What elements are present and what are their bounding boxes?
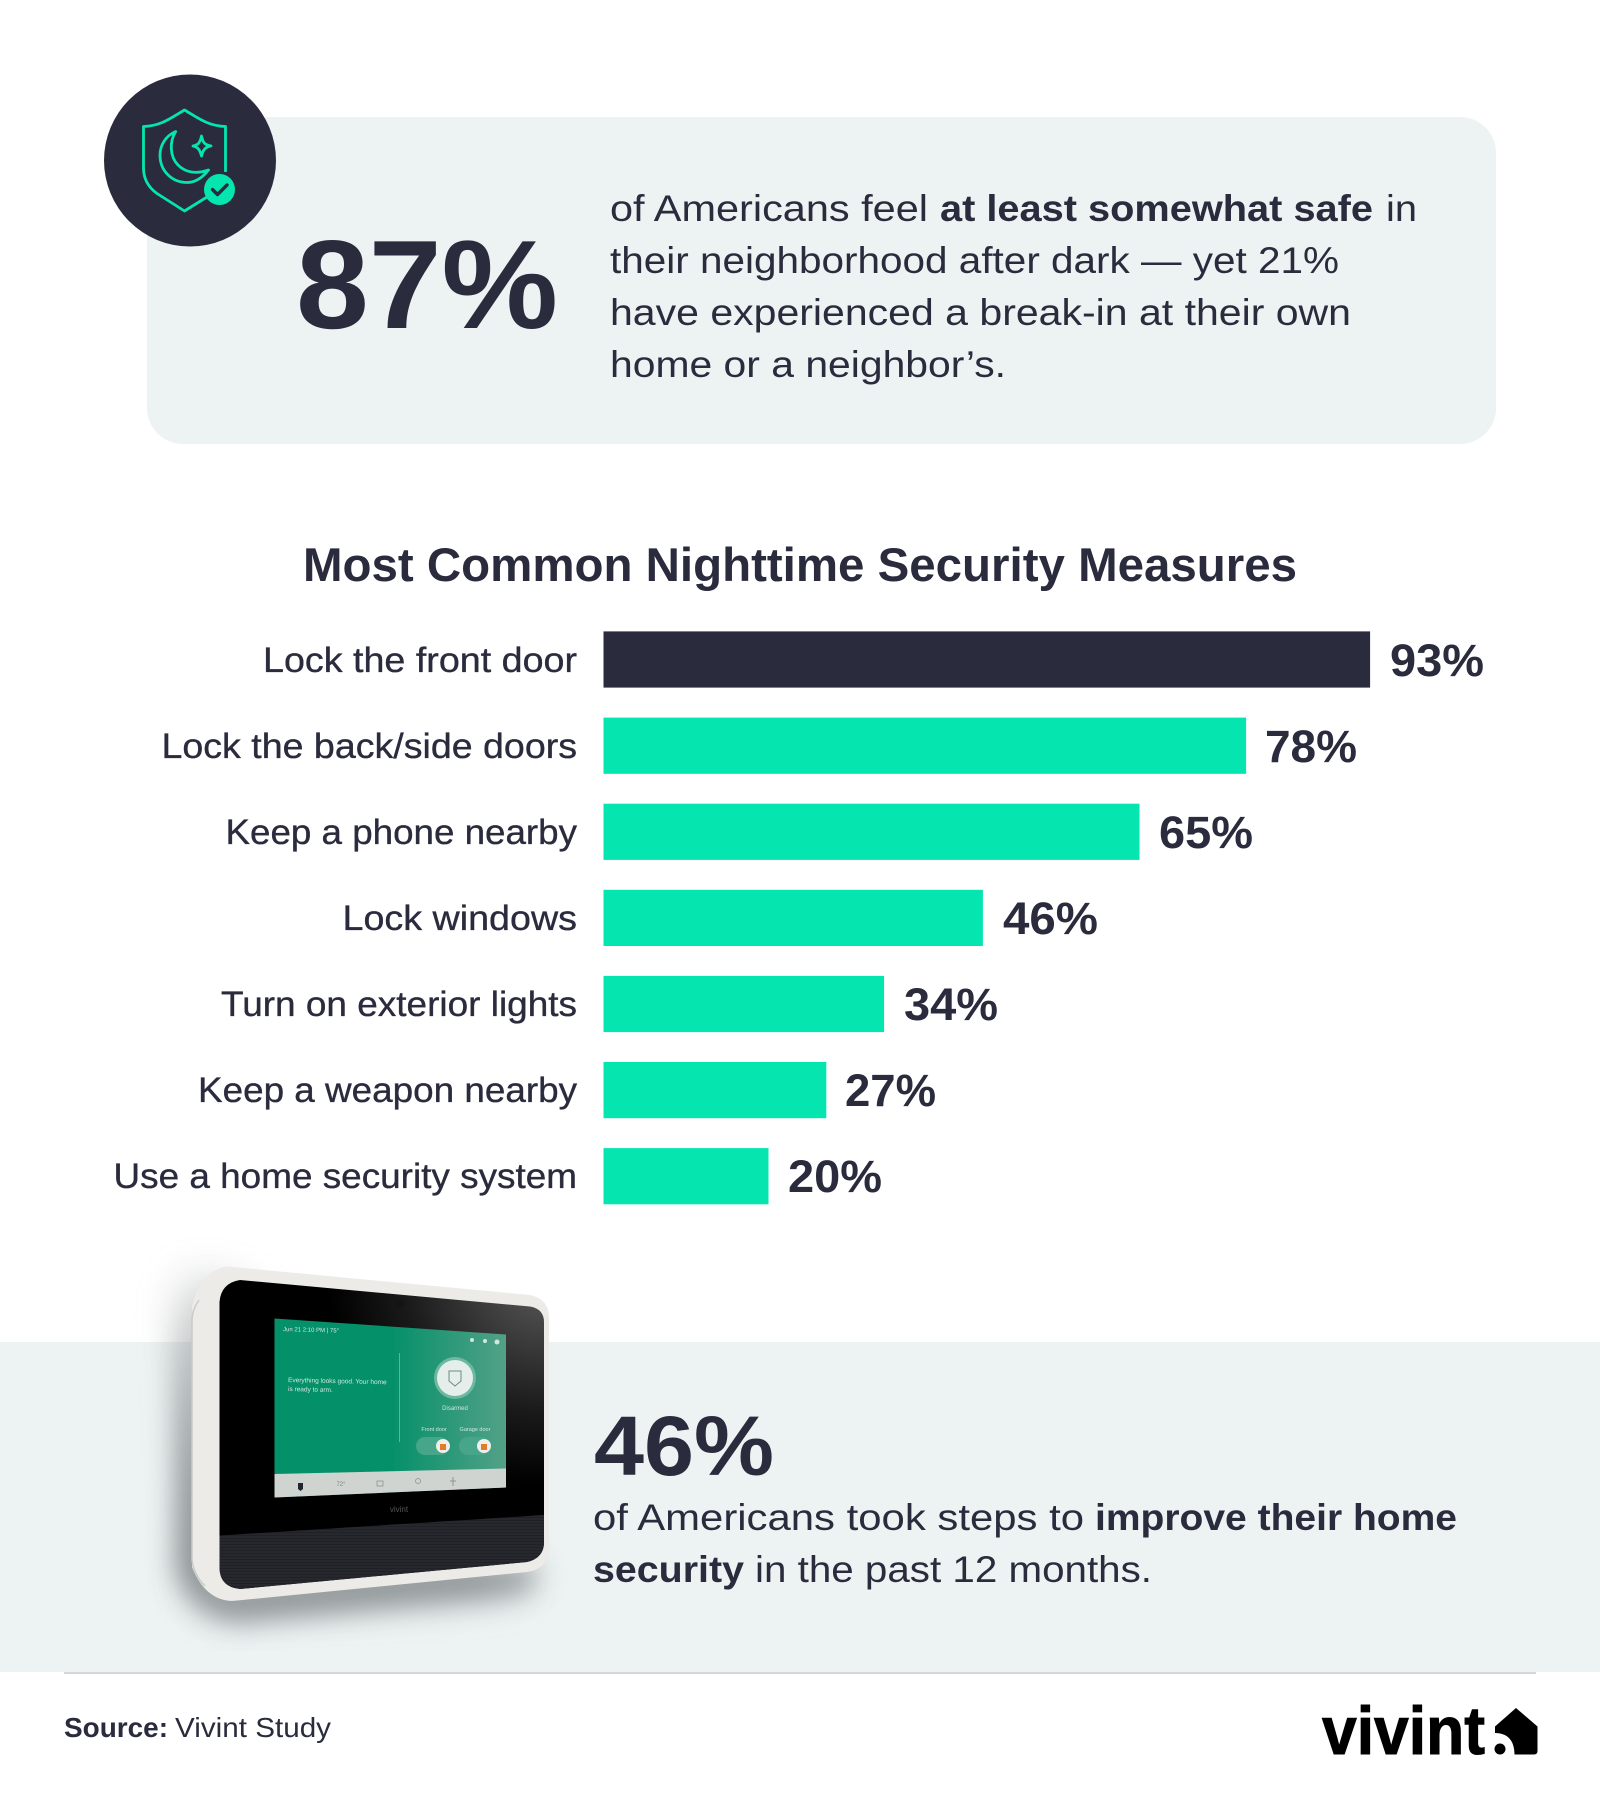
bottom statistic description: security [593,1549,744,1590]
bottom statistic description: of Americans took steps to [593,1497,1084,1538]
row: Turn on exterior lights: 34% [904,979,998,1030]
device: security panel: vivint [390,1505,409,1514]
row: Keep a phone nearby: Keep a phone nearby [226,812,577,852]
row: Keep a weapon nearby [198,1062,936,1118]
row: Use a home security system [114,1148,882,1204]
bottom statistic description [593,1497,1457,1590]
statistic description: at least somewhat safe [940,188,1373,229]
row: Lock the back/side doors: Lock the back/side doors [162,726,577,766]
row: Keep a phone nearby: 65% [1159,807,1253,858]
row: Lock windows: 46% [1003,893,1098,944]
big number 87%: 87% [296,214,558,355]
chart title: Most Common Nighttime Security Measures [303,538,1297,591]
row: Turn on exterior lights [221,976,998,1032]
statistic description: home or a neighbor’s. [610,344,1006,385]
source note: Source: [64,1712,168,1743]
row: Use a home security system: 20% [788,1151,882,1202]
row: Use a home security system: Use a home security system [114,1156,577,1196]
screen: is ready to arm. [288,1386,333,1394]
row: Lock windows [342,890,1098,946]
statistic description: of Americans feel [610,188,928,229]
row: Turn on exterior lights: Turn on exterior lights [221,984,577,1024]
screen: Everything looks good. Your home [288,1377,387,1386]
icon: shield with moon and check [104,74,276,246]
row: Lock the front door [263,631,1484,688]
panel: top statistic [147,117,1496,444]
panel background [147,117,1496,444]
big number 46%: 46% [594,1399,774,1493]
screen [274,1318,506,1498]
screen: Disarmed [442,1406,468,1412]
row: Lock the back/side doors: 78% [1265,721,1357,772]
logo: vivint: vivint [1322,1693,1485,1769]
row: Lock the front door: 93% [1390,635,1484,686]
statistic description: in [1386,188,1417,229]
source note [64,1712,331,1743]
row: Lock windows: Lock windows [342,898,577,938]
row: Lock the back/side doors [162,718,1357,774]
footer divider [64,1672,1536,1674]
bottom statistic description: in the past 12 months. [755,1549,1152,1590]
screen: 72° [336,1482,346,1488]
screen: Front door [421,1427,447,1433]
statistic description [610,188,1417,385]
screen: Jun 21 2:10 PM | 75° [283,1327,340,1334]
device: security panel [175,1266,549,1622]
row: Keep a weapon nearby: 27% [845,1065,936,1116]
statistic description: their neighborhood after dark — yet 21% [610,240,1339,281]
statistic description: have experienced a break-in at their own [610,292,1351,333]
screen: Garage door [460,1427,491,1433]
row: Keep a weapon nearby: Keep a weapon nearby [198,1070,577,1110]
bottom statistic description: improve their home [1095,1497,1457,1538]
row: Keep a phone nearby [226,804,1253,860]
row: Lock the front door: Lock the front door [263,640,577,680]
panel: bottom band [0,1342,1600,1672]
source note: Vivint Study [175,1712,331,1743]
bar chart [114,631,1484,1204]
